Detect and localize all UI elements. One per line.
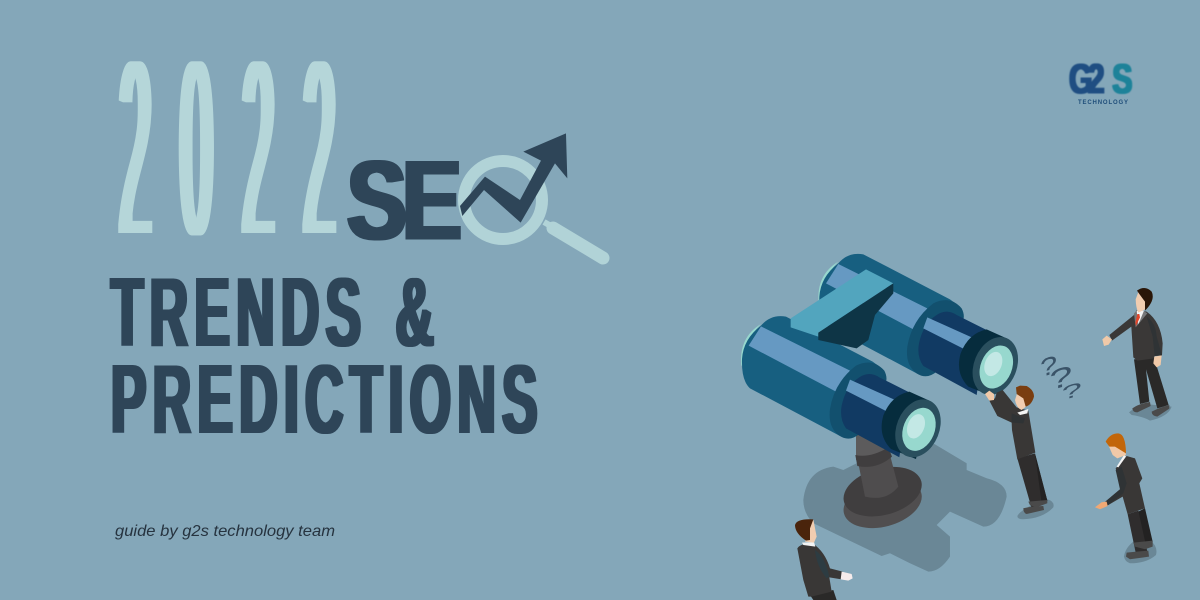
text: author credit: guide by g2s technology team — [115, 523, 335, 540]
heading: trends and predictions — [111, 258, 544, 454]
logo letters: G2S — [1069, 55, 1132, 102]
back barrel — [818, 254, 1026, 402]
question marks: ? — [1040, 350, 1057, 383]
person: lower right — [1095, 433, 1156, 563]
front barrel — [741, 316, 949, 464]
logo tagline: TECHNOLOGY — [1078, 100, 1128, 106]
binocular ground shadow — [803, 443, 1007, 572]
stand column — [855, 433, 898, 498]
illustration: binoculars — [741, 254, 1026, 572]
person: bottom left — [795, 519, 853, 600]
bridge — [791, 269, 893, 348]
person: holding binoculars — [985, 386, 1054, 519]
heading: 2022: 2022 — [120, 6, 335, 292]
icon: magnifying glass — [464, 161, 603, 258]
stand base — [838, 459, 927, 536]
logo: G2S Technology — [1069, 55, 1132, 106]
question marks: ? — [1049, 359, 1072, 397]
heading: SE letters: SE — [347, 139, 458, 263]
person: top right — [1102, 288, 1172, 421]
figures and question marks — [985, 350, 1156, 563]
heading line: trends: TRENDS & — [111, 258, 440, 367]
icon: growth arrow — [460, 133, 567, 223]
logo: SEO with magnifier and arrow — [347, 133, 603, 263]
question marks: ? — [1062, 378, 1082, 405]
question marks — [1040, 350, 1082, 405]
heading line: predictions: PREDICTIONS — [111, 345, 544, 454]
